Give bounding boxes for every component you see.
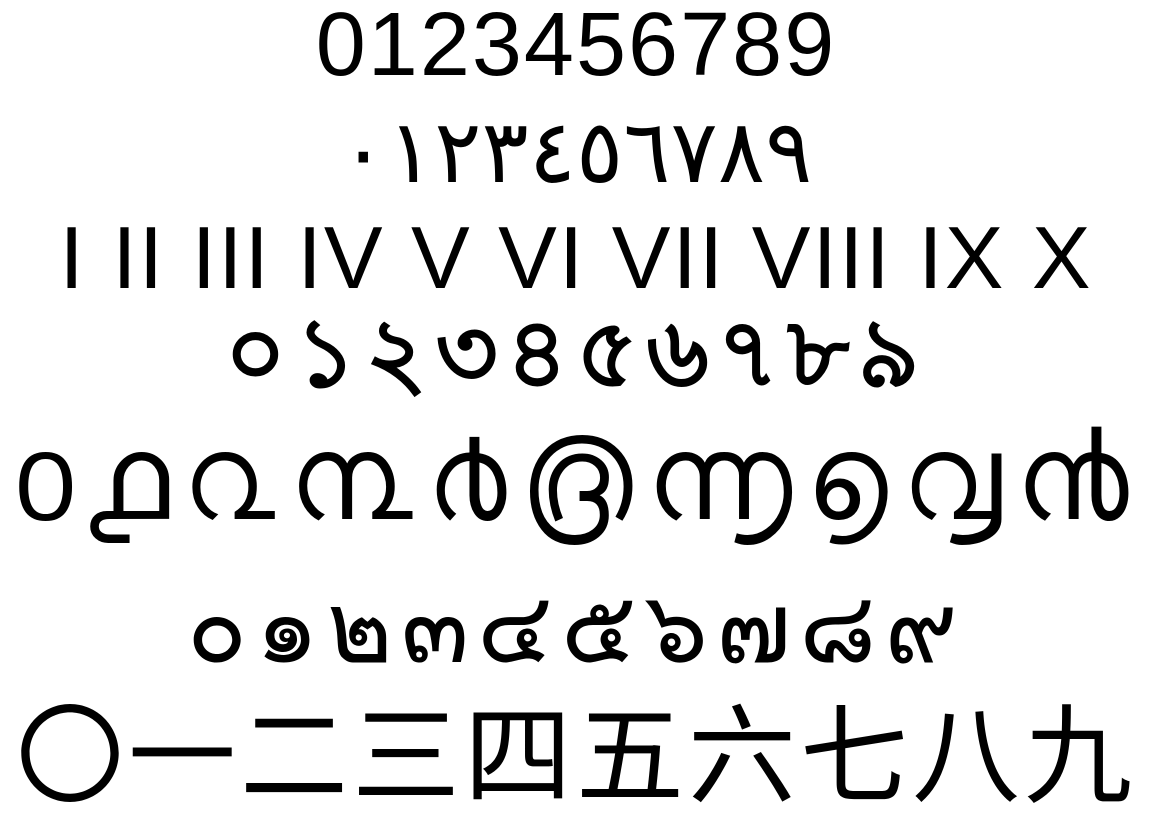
- row: malayalam digits: ൦൧൨൩൪൫൬൭൮൯: [10, 411, 1142, 545]
- row: eastern arabic digits: ٠١٢٣٤٥٦٧٨٩: [340, 102, 812, 201]
- row: bengali digits: ০১২৩৪৫৬৭৮৯: [224, 300, 928, 407]
- row: thai digits: ๐๑๒๓๔๕๖๗๘๙: [186, 572, 966, 684]
- row: roman numerals: I II III IV V VI VII VIII IX X: [59, 208, 1093, 307]
- row: chinese numerals: 〇一二三四五六七八九: [16, 670, 1136, 826]
